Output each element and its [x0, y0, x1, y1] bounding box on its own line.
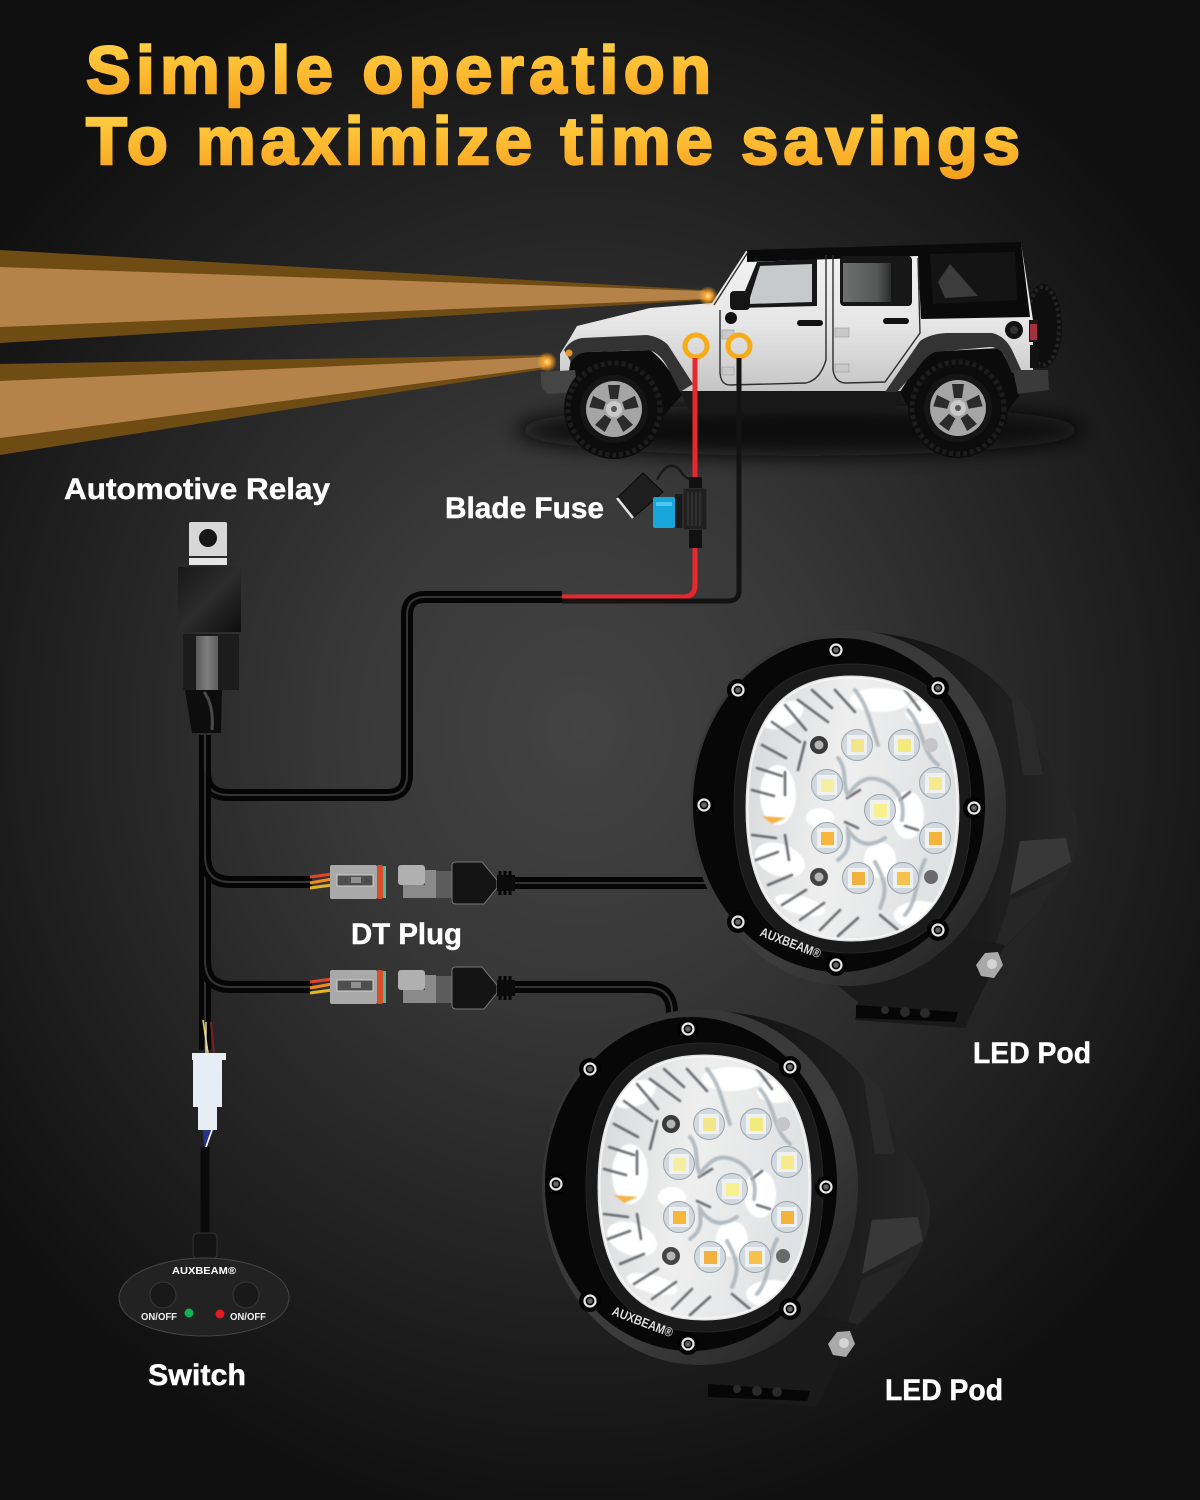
black negative wire — [562, 358, 739, 601]
left button — [150, 1282, 176, 1308]
label: dt plug: DT Plug — [351, 918, 462, 951]
rear wheel — [908, 358, 1008, 458]
white inline connector — [192, 1020, 226, 1147]
upper beam — [0, 250, 705, 343]
brand text, upper pod: AUXBEAM® — [758, 924, 824, 961]
black cable to relay — [205, 597, 562, 795]
door handles — [797, 318, 909, 326]
icon: blade fuse holder — [617, 466, 707, 548]
red positive wire — [562, 358, 695, 597]
main harness — [205, 358, 739, 1240]
side mirror — [725, 291, 750, 324]
red indicator — [216, 1310, 224, 1318]
light beams from the vehicle — [0, 250, 705, 455]
left on/off: ON/OFF — [141, 1312, 177, 1323]
hardtop — [747, 242, 1030, 319]
fender marker — [566, 350, 572, 356]
upper led pod — [690, 630, 1078, 1028]
battery terminal markers — [685, 335, 750, 357]
vehicle: white jeep — [515, 242, 1085, 459]
fuel cap — [1005, 321, 1023, 339]
cable to upper pod — [515, 877, 725, 889]
label: automotive relay: Automotive Relay — [64, 473, 330, 506]
lower beam — [0, 355, 545, 455]
title — [86, 33, 1020, 179]
title: Simple operation — [86, 33, 711, 108]
amber glow, top — [698, 286, 718, 306]
switch brand: AUXBEAM® — [172, 1266, 237, 1277]
amber glow, bumper — [537, 352, 557, 372]
taillight — [1029, 320, 1039, 368]
brand text, lower pod: AUXBEAM® — [610, 1303, 676, 1340]
rear bumper — [1013, 370, 1049, 394]
switch cable — [200, 1147, 210, 1240]
rear wheel arch — [900, 348, 1020, 420]
label: switch: Switch — [148, 1359, 246, 1392]
hinges — [722, 328, 849, 375]
rear door window — [840, 256, 912, 306]
trunk cable — [199, 770, 211, 1050]
sill — [680, 391, 905, 412]
cable to lower pod — [515, 987, 672, 1030]
upper dt plug connector — [310, 862, 515, 904]
switch controller — [119, 1233, 289, 1336]
rear side glass — [930, 252, 1017, 304]
lower dt plug connector — [310, 967, 515, 1009]
label: upper led pod: LED Pod — [973, 1037, 1091, 1070]
spare tyre — [1024, 284, 1062, 368]
green indicator — [184, 1308, 194, 1318]
body — [560, 243, 1033, 392]
front bumper — [541, 370, 578, 394]
front wheel arch — [566, 350, 682, 420]
front wheel — [564, 359, 664, 459]
title: To maximize time savings — [86, 104, 1020, 179]
first branch — [205, 855, 312, 882]
right on/off: ON/OFF — [230, 1312, 266, 1323]
right button — [233, 1282, 259, 1308]
front window — [738, 259, 817, 308]
label: blade fuse: Blade Fuse — [445, 492, 604, 525]
door lines — [714, 252, 920, 385]
icon: automotive relay — [178, 522, 241, 733]
second branch — [205, 960, 312, 987]
label: lower led pod: LED Pod — [885, 1374, 1003, 1407]
lower led pod — [542, 1009, 930, 1407]
